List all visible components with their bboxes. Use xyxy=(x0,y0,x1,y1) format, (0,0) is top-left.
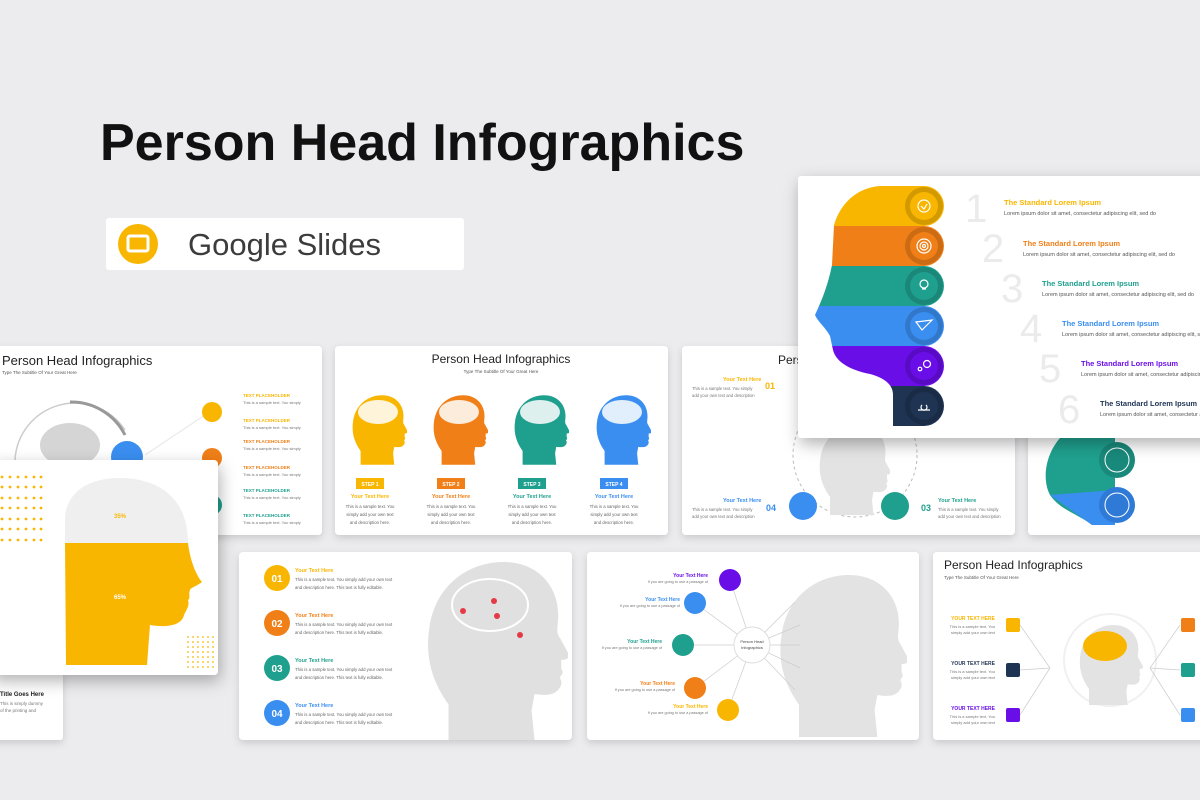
slide: four step heads: and description here. xyxy=(594,520,634,525)
head bands xyxy=(815,186,944,426)
slide: circular head: add your own text and description xyxy=(938,514,1001,519)
slide: brain with icons xyxy=(933,552,1200,740)
slide: six band head (front): The Standard Lorem Ipsum xyxy=(1062,319,1159,328)
badge: Google Slides xyxy=(106,218,464,270)
numbered items xyxy=(965,187,1080,432)
slide: small bottom-left: Title Goes Here xyxy=(0,692,45,698)
slide: six band head (front): The Standard Lorem Ipsum xyxy=(1100,399,1197,408)
head chart: 35% xyxy=(114,514,127,520)
slide: numbered list with brain: 01 xyxy=(271,574,283,585)
slide: six band head (front): The Standard Lorem Ipsum xyxy=(1023,239,1120,248)
slide: six band head (front): The Standard Lorem Ipsum xyxy=(1081,359,1178,368)
slide: radial brain (back-left): Person Head Infographics xyxy=(2,353,153,368)
slide: hub diagram: Your Text Here xyxy=(673,704,708,710)
slide: radial brain (back-left): This is a sample text. You simply xyxy=(243,425,301,430)
slide: four step heads: This is a sample text. You xyxy=(427,504,476,509)
slide: numbered list with brain: and description here. This text is fully editable. xyxy=(295,675,383,680)
slide: numbered list with brain: and description here. This text is fully editable. xyxy=(295,630,383,635)
slide: four step heads: Your Text Here xyxy=(513,494,551,500)
slide: radial brain (back-left): TEXT PLACEHOLDER xyxy=(243,418,291,423)
slide: circular head: 03 xyxy=(921,503,931,513)
numbered items: 3 xyxy=(1001,267,1023,311)
numbered items: 6 xyxy=(1058,388,1080,432)
slide: radial brain (back-left): This is a sample text. You simply xyxy=(243,472,301,477)
slide: numbered list with brain: This is a sample text. You simply add your own text xyxy=(295,577,393,582)
slide: four step heads xyxy=(335,346,668,535)
slide: four step heads: simply add your own text xyxy=(427,512,475,517)
slide: brain with icons: Person Head Infographics xyxy=(944,558,1083,572)
slide: circular head: Your Text Here xyxy=(723,498,761,504)
icon: google slides xyxy=(118,224,158,264)
slide: four step heads: Person Head Infographics xyxy=(432,352,570,366)
slide: hub diagram: If you are going to use a passage of xyxy=(648,711,709,715)
slide: numbered list with brain: Your Text Here xyxy=(295,658,333,664)
slide: numbered list with brain: Your Text Here xyxy=(295,568,333,574)
slide: four step heads: simply add your own text xyxy=(346,512,394,517)
slide: circular head: Your Text Here xyxy=(723,377,761,383)
slide: four step heads: and description here. xyxy=(350,520,390,525)
slide: circular head: This is a sample text. You simply xyxy=(692,386,753,391)
slide: numbered list with brain: and description here. This text is fully editable. xyxy=(295,720,383,725)
slide: brain with icons: simply add your own text xyxy=(951,720,996,725)
slide: numbered list with brain: Your Text Here xyxy=(295,703,333,709)
slide: hub diagram: If you are going to use a passage of xyxy=(615,688,676,692)
slide: yellow percentage head (front-left) xyxy=(0,460,218,675)
slide: brain with icons: Type The Subtitle Of Your Great Here xyxy=(944,575,1019,580)
slide: six band head (front): Lorem ipsum dolor sit amet, consectetur adipiscing elit, sed do xyxy=(1042,292,1194,298)
slide: four step heads: and description here. xyxy=(431,520,471,525)
slide: four step heads: This is a sample text. You xyxy=(508,504,557,509)
slide: radial brain (back-left): TEXT PLACEHOLDER xyxy=(243,513,291,518)
slide: hub diagram: If you are going to use a passage of xyxy=(602,646,663,650)
slide: brain with icons: YOUR TEXT HERE xyxy=(951,616,996,622)
slide: circular head: add your own text and description xyxy=(692,393,755,398)
slide: numbered list with brain: This is a sample text. You simply add your own text xyxy=(295,667,393,672)
slide: four step heads: Type The Subtitle Of Your Great Here xyxy=(464,369,539,374)
numbered items: 5 xyxy=(1039,347,1061,391)
slide: brain with icons: This is a sample text. You xyxy=(950,624,995,629)
numbered items: 2 xyxy=(982,227,1004,271)
slide: numbered list with brain: and description here. This text is fully editable. xyxy=(295,585,383,590)
numbered items: 1 xyxy=(965,187,987,231)
slide: circular head: Pers xyxy=(778,353,803,367)
slide: radial brain (back-left): TEXT PLACEHOLDER xyxy=(243,439,291,444)
slide: four step heads: STEP 1 xyxy=(361,482,379,488)
slide: radial brain (back-left): Type The Subtitle Of Your Great Here xyxy=(2,370,77,375)
slide: numbered list with brain: 03 xyxy=(271,664,283,675)
badge: Google Slides: Google Slides xyxy=(188,227,381,262)
slide: circular head: 04 xyxy=(766,503,776,513)
slide: four step heads: This is a sample text. You xyxy=(346,504,395,509)
slide: numbered list with brain: 02 xyxy=(271,619,283,630)
slide: small bottom-left: This is simply dummy xyxy=(0,701,44,706)
slide: four step heads: Your Text Here xyxy=(351,494,389,500)
slide: hub diagram xyxy=(587,552,919,740)
slide: four step heads: Your Text Here xyxy=(595,494,633,500)
slide: radial brain (back-left): TEXT PLACEHOLDER xyxy=(243,465,291,470)
slide: brain with icons: simply add your own text xyxy=(951,630,996,635)
slide: circular head: Your Text Here xyxy=(938,498,976,504)
slide: four step heads: STEP 4 xyxy=(605,482,623,488)
slide: numbered list with brain: This is a sample text. You simply add your own text xyxy=(295,622,393,627)
slide: small bottom-left xyxy=(0,670,63,740)
slide: brain with icons: simply add your own text xyxy=(951,675,996,680)
slide: six band head (front): Lorem ipsum dolor sit amet, consectetur adipiscing elit, sed do xyxy=(1004,211,1156,217)
slide: four step heads: simply add your own text xyxy=(508,512,556,517)
slide: circular head: This is a sample text. You simply xyxy=(938,507,999,512)
slide: four step heads: Your Text Here xyxy=(432,494,470,500)
slide: four step heads: STEP 2 xyxy=(442,482,460,488)
slide: radial brain (back-left): TEXT PLACEHOLDER xyxy=(243,488,291,493)
slide: brain with icons: This is a sample text. You xyxy=(950,714,995,719)
slide: hub diagram: Your Text Here xyxy=(645,597,680,603)
slide: numbered list with brain: 04 xyxy=(271,709,283,720)
slide: radial brain (back-left): TEXT PLACEHOLDER xyxy=(243,393,291,398)
slide: four step heads: and description here. xyxy=(512,520,552,525)
dots xyxy=(1,476,214,668)
slide: circular head xyxy=(682,346,1015,535)
slide: hub diagram: Person Head xyxy=(740,639,764,644)
slide: radial brain (back-left): This is a sample text. You simply xyxy=(243,520,301,525)
slide: circular head: This is a sample text. You simply xyxy=(692,507,753,512)
slide: radial brain (back-left): This is a sample text. You simply xyxy=(243,446,301,451)
slide: circular head: 01 xyxy=(765,381,775,391)
slide: four step heads: This is a sample text. You xyxy=(590,504,639,509)
numbered items: 4 xyxy=(1020,307,1042,351)
slide: small bottom-left: of the printing and xyxy=(0,708,37,713)
slide: hub diagram: If you are going to use a passage of xyxy=(648,580,709,584)
slide: hub diagram: Your Text Here xyxy=(627,639,662,645)
slide: circular head: add your own text and description xyxy=(692,514,755,519)
title: Person Head Infographics xyxy=(100,114,744,172)
slide: six band head (front) xyxy=(798,176,1200,438)
head chart xyxy=(65,478,202,665)
slide: four step heads: simply add your own text xyxy=(590,512,638,517)
slide: hub diagram: Your Text Here xyxy=(640,681,675,687)
slide: hub diagram: Infographics xyxy=(741,645,763,650)
slide: radial brain (back-left): This is a sample text. You simply xyxy=(243,400,301,405)
slide: hub diagram: Your Text Here xyxy=(673,573,708,579)
slide: four step heads: STEP 3 xyxy=(523,482,541,488)
slide: hub diagram: If you are going to use a passage of xyxy=(620,604,681,608)
slide: radial brain (back-left) xyxy=(0,346,322,535)
slide: numbered list with brain xyxy=(239,552,572,740)
slide: brain with icons: YOUR TEXT HERE xyxy=(951,661,996,667)
slide: six band head (front): The Standard Lorem Ipsum xyxy=(1042,279,1139,288)
slide: brain with icons: This is a sample text. You xyxy=(950,669,995,674)
slide: numbered list with brain: This is a sample text. You simply add your own text xyxy=(295,712,393,717)
slide: numbered list with brain: Your Text Here xyxy=(295,613,333,619)
slide: six band head (front): Lorem ipsum dolor sit amet, consectetur adipiscing elit, sed do xyxy=(1023,252,1175,258)
slide: brain with icons: YOUR TEXT HERE xyxy=(951,706,996,712)
slide: six band head (front): The Standard Lorem Ipsum xyxy=(1004,198,1101,207)
slide: partial teal head xyxy=(1028,346,1200,535)
slide: radial brain (back-left): This is a sample text. You simply xyxy=(243,495,301,500)
head chart: 65% xyxy=(114,595,127,601)
